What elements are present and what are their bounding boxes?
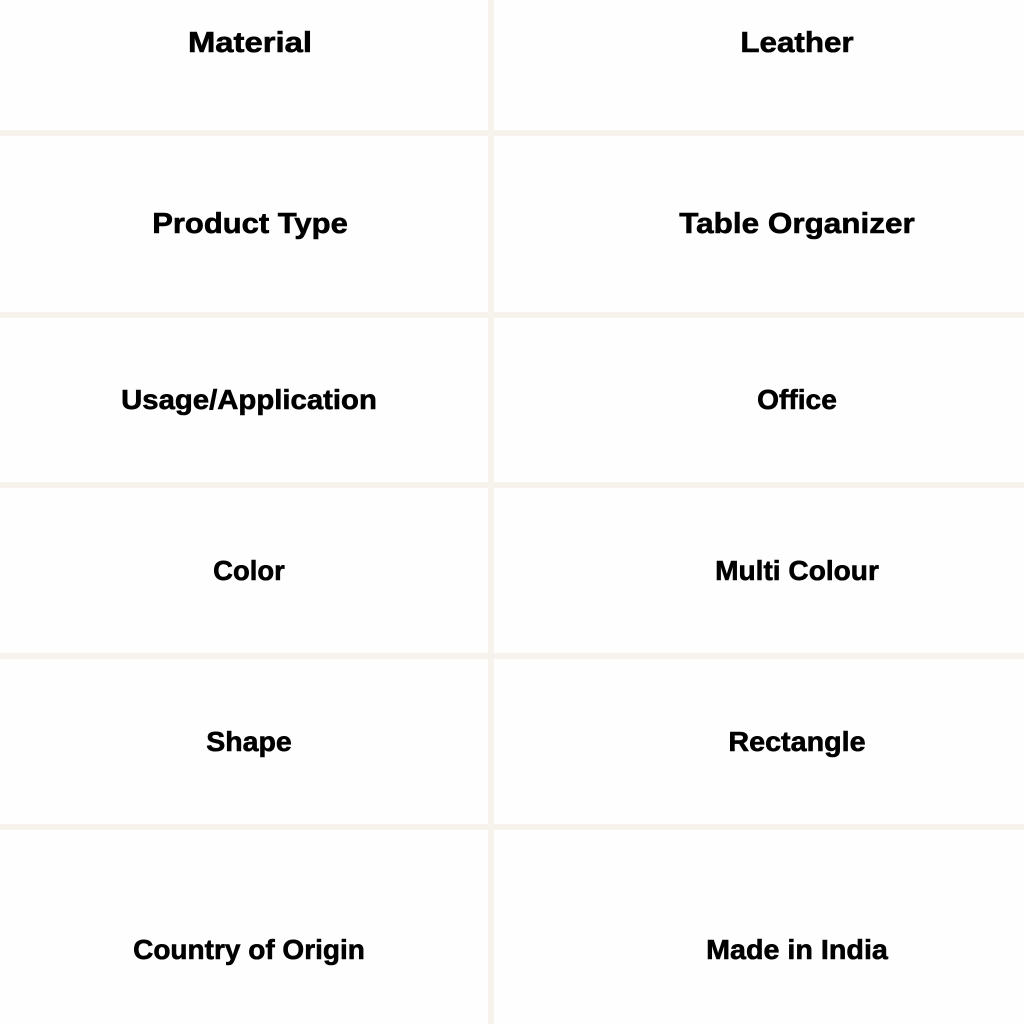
value: Made in India: Made in India	[706, 934, 888, 965]
value: Leather: Leather	[740, 27, 854, 59]
value: Rectangle: Rectangle	[728, 726, 866, 757]
value: Table Organizer: Table Organizer	[679, 208, 915, 240]
label: Usage/Application: Usage/Application	[121, 384, 377, 415]
label: Color: Color	[213, 555, 285, 586]
value: Office: Office	[757, 384, 837, 415]
label: Product Type: Product Type	[152, 208, 348, 240]
label: Country of Origin: Country of Origin	[133, 934, 365, 965]
value: Multi Colour: Multi Colour	[715, 555, 879, 586]
label: Material: Material	[188, 27, 312, 59]
label: Shape: Shape	[206, 726, 292, 757]
